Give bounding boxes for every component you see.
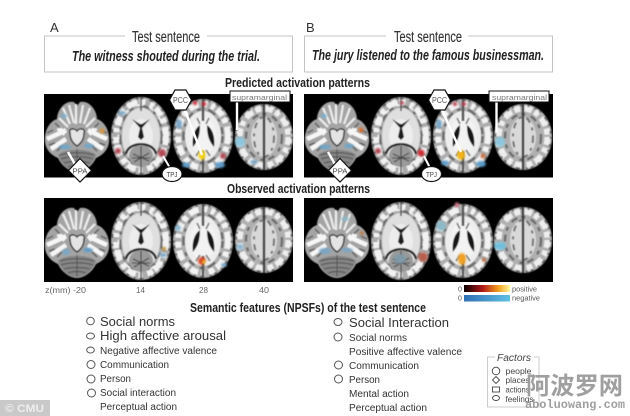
watermark	[525, 373, 625, 412]
feature list B	[334, 315, 462, 414]
heading: semantic features: Semantic features (NPSFs) of the test sentence	[190, 300, 426, 315]
feature list A: Perceptual action	[100, 402, 177, 413]
legend: colour scale: 0	[458, 286, 462, 294]
watermark: 阿波罗网	[526, 373, 623, 400]
heading: test sentence A: Test sentence	[132, 29, 200, 46]
feature list B: Communication	[349, 361, 419, 372]
activation blobs	[59, 101, 258, 168]
panel: observed brain scans B	[304, 198, 553, 282]
feature list B: Perceptual action	[349, 403, 427, 414]
callout: PCC B: PCC	[432, 96, 447, 105]
feature list A: Communication	[100, 360, 169, 371]
feature list B: Social Interaction	[349, 315, 449, 330]
legend: factors: places	[506, 375, 530, 385]
callout: PPA A: PPA	[72, 166, 88, 176]
z-axis labels: z(mm) -20	[45, 286, 87, 295]
legend: colour scale: positive	[512, 286, 537, 294]
legend: factors: actions	[506, 384, 530, 394]
feature list A	[86, 314, 226, 413]
callout: PPA A	[68, 152, 92, 182]
feature list B: Social norms	[349, 333, 407, 344]
callout: PPA B	[328, 152, 352, 182]
z-axis labels	[45, 286, 270, 295]
panel: predicted brain scans B	[304, 94, 553, 178]
heading: predicted activation patterns: Predicted activation patterns	[225, 76, 370, 90]
feature list A: Negative affective valence	[100, 346, 217, 357]
legend: factors: people	[506, 366, 532, 376]
panel: observed brain scans A	[44, 198, 293, 282]
credit badge	[0, 400, 50, 416]
activation blobs	[319, 101, 505, 167]
z-axis labels: 28	[199, 286, 209, 295]
callout: PCC A	[170, 90, 202, 155]
activation blobs	[62, 225, 244, 267]
panel: predicted brain scans A	[44, 94, 293, 178]
callout: supramarginal B: supramarginal	[492, 93, 547, 102]
feature list A: Person	[100, 374, 131, 385]
label: panel A: A	[50, 20, 59, 35]
feature list B: Mental action	[349, 389, 409, 400]
z-axis labels: 40	[259, 286, 270, 295]
callout: TPJ A	[162, 156, 182, 182]
callout: TPJ B: TPJ	[426, 170, 437, 179]
callout: PCC B	[428, 90, 461, 152]
callout: supramarginal B	[489, 91, 549, 132]
legend: factors	[488, 353, 539, 407]
legend: colour scale: negative	[512, 296, 540, 302]
heading: observed activation patterns: Observed activation patterns	[227, 182, 370, 196]
label: panel B: B	[306, 20, 315, 35]
feature list A: Social norms	[100, 314, 175, 329]
credit badge: © CMU	[5, 403, 44, 415]
callout: TPJ A: TPJ	[166, 170, 178, 179]
feature list A: High affective arousal	[100, 328, 226, 343]
watermark: aboluowang.com	[525, 399, 625, 412]
legend: colour scale	[458, 285, 540, 302]
test sentence box B	[304, 29, 552, 72]
test sentence box A	[44, 29, 292, 72]
callout: TPJ B	[422, 156, 442, 182]
legend: factors: Factors	[497, 353, 531, 364]
legend: factors: feelings	[506, 394, 534, 404]
z-axis labels: 14	[136, 286, 146, 295]
legend: colour scale: 0	[458, 296, 462, 302]
feature list B: Positive affective valence	[349, 347, 462, 358]
sentence A: The witness shouted during the trial.	[72, 49, 260, 65]
sentence B: The jury listened to the famous businessman.	[312, 48, 544, 64]
callout: supramarginal A: supramarginal	[232, 93, 287, 102]
callout: supramarginal A	[230, 91, 290, 130]
heading: test sentence B: Test sentence	[394, 29, 462, 46]
callout: PPA B: PPA	[332, 166, 348, 176]
feature list A: Social interaction	[100, 388, 176, 399]
callout: PCC A: PCC	[173, 96, 188, 105]
activation blobs	[319, 202, 506, 265]
feature list B: Person	[349, 375, 380, 386]
